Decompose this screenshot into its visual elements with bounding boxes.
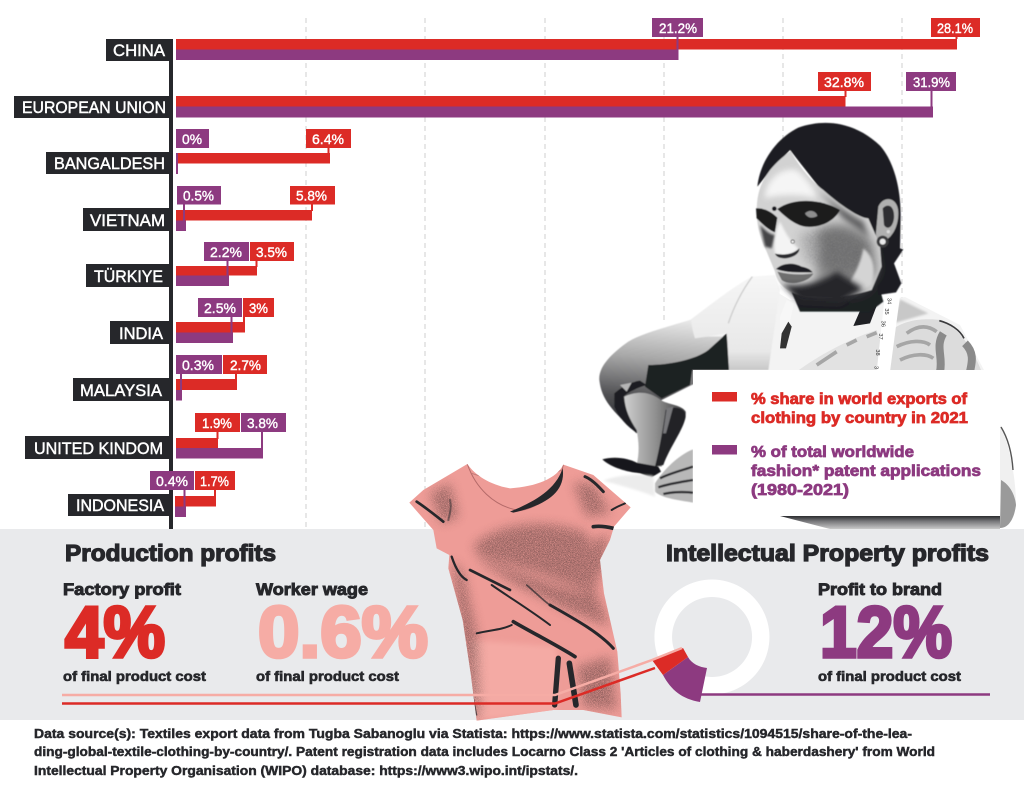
saree and tape: 37 (877, 333, 883, 340)
row: India: 3% (249, 300, 268, 316)
chin shadow (782, 272, 863, 303)
left cheek shadow (760, 225, 775, 248)
saree and tape: 36 (880, 321, 886, 327)
vertical axis (169, 39, 173, 529)
bindi (772, 206, 777, 211)
shirt body (409, 464, 631, 721)
row: China: CHINA (113, 42, 165, 60)
lower shirt highlight (470, 640, 557, 720)
row: United Kingdom: 3.8% (247, 415, 278, 431)
factory profit: 4% (65, 593, 165, 673)
scissors (602, 458, 661, 477)
panel: profits (0, 529, 1024, 720)
mottled shading (430, 483, 617, 720)
connector lines and donut (62, 580, 990, 704)
profit to brand: 12% (820, 593, 952, 673)
data source note (34, 727, 935, 778)
legend: patents: (1980-2021) (751, 482, 849, 499)
heading: Intellectual Property profits (666, 540, 989, 566)
row: Bangladesh (46, 129, 351, 174)
panel: intellectual property profits (666, 540, 989, 684)
factory profit: of final product cost (63, 668, 206, 684)
legend: patents: fashion* patent applications (751, 463, 981, 480)
worker wage: Worker wage (256, 581, 368, 599)
line: factory profit (62, 668, 655, 704)
row: China: 28.1% (937, 20, 973, 36)
chart gridlines (306, 18, 902, 528)
cloth (603, 475, 655, 497)
row: Bangladesh: BANGALDESH (54, 155, 165, 173)
cutting hand (624, 393, 686, 467)
data source note: ding-global-textile-clothing-by-country/. Patent registration data includes Locarno Class 2 'Articles of clothing & haberdashery' from World (34, 745, 935, 759)
row: European Union: 32.8% (824, 74, 864, 90)
saree and tape (780, 293, 982, 372)
row: United Kingdom (25, 413, 286, 459)
wrist band (614, 381, 647, 433)
worker wage: 0.6% (258, 593, 428, 673)
row: European Union (14, 72, 956, 118)
legend: patents (712, 444, 981, 499)
head (756, 123, 903, 312)
ear (875, 199, 898, 243)
worker wage: of final product cost (256, 668, 399, 684)
row: Indonesia (68, 471, 235, 517)
arm, hands and scissors (599, 275, 780, 503)
jaw (850, 248, 874, 290)
neck (790, 265, 883, 312)
factory profit: Factory profit (63, 581, 182, 599)
row: Malaysia (73, 355, 267, 401)
legend: exports (712, 391, 968, 427)
nose (774, 222, 798, 255)
row: Vietnam: VIETNAM (90, 212, 165, 230)
bar chart (14, 18, 980, 529)
legend: patents: % of total worldwide (751, 444, 914, 461)
collar (467, 464, 563, 511)
row: United Kingdom: UNITED KINDOM (34, 440, 163, 458)
data source note: Data source(s): Textiles export data from Tugba Sabanoglu via Statista: https://www.statista.com/statistics/1094515/share-of-the-lea- (34, 727, 912, 741)
row: Malaysia: 2.7% (230, 357, 261, 373)
earring (877, 236, 889, 248)
left eye socket (756, 208, 777, 232)
collar fold (510, 468, 563, 513)
row: Vietnam: 0.5% (183, 188, 214, 204)
row: Malaysia: 0.3% (182, 357, 214, 373)
profit to brand: Profit to brand (818, 581, 942, 599)
row: Indonesia: INDONESIA (76, 497, 164, 515)
photo: garment worker cutting cloth (599, 123, 1016, 529)
cheek shadow (813, 224, 877, 293)
right eye socket (777, 201, 840, 227)
row: Türkiye: 2.2% (210, 244, 242, 260)
legend: exports: % share in world exports of (751, 391, 968, 408)
row: Vietnam (83, 186, 335, 231)
row: India: 2.5% (204, 300, 236, 316)
purple wedge (663, 657, 707, 702)
t-shirt (409, 464, 631, 721)
factory profit (63, 581, 206, 684)
row: India: INDIA (119, 325, 163, 343)
line: worker wage (62, 648, 682, 695)
hair (757, 123, 903, 295)
row: China: 21.2% (659, 20, 697, 36)
forehead highlight (765, 170, 817, 198)
row: Türkiye: 3.5% (256, 244, 287, 260)
row: United Kingdom: 1.9% (202, 415, 232, 431)
row: Türkiye: TÜRKIYE (94, 268, 163, 286)
row: China (106, 18, 980, 61)
saree and tape: 35 (883, 308, 889, 315)
profit to brand: of final product cost (818, 668, 961, 684)
cloth shadow under legend (780, 516, 1000, 529)
red wedge (652, 648, 688, 675)
lower right arm (1000, 425, 1016, 528)
row: Indonesia: 1.7% (200, 473, 229, 489)
saree and tape: 38 (874, 349, 880, 356)
sleeve (691, 275, 780, 370)
row: Malaysia: MALAYSIA (80, 382, 162, 400)
legend: exports: clothing by country in 2021 (751, 410, 968, 427)
data source note: Intellectual Property Organisation (WIPO) database: https://www3.wipo.int/ipstats/. (34, 764, 578, 778)
row: Indonesia: 0.4% (156, 473, 188, 489)
row: Vietnam: 5.8% (296, 188, 327, 204)
mouth (776, 264, 813, 272)
underarm shadow (645, 333, 729, 398)
temple shadow (818, 190, 868, 238)
row: Bangladesh: 6.4% (312, 131, 344, 147)
line: brand profit (700, 693, 990, 696)
legend panel (693, 370, 1000, 516)
folds (417, 477, 625, 715)
other hand (655, 449, 693, 503)
upper arm (599, 319, 728, 433)
saree and tape: 34 (885, 298, 891, 304)
row: Bangladesh: 0% (182, 131, 202, 147)
panel: production profits (63, 540, 428, 684)
donut ring (654, 580, 769, 694)
row: Türkiye (86, 242, 294, 287)
row: European Union: 31.9% (913, 74, 950, 90)
saree and tape: 3 (873, 366, 879, 369)
face (757, 151, 882, 298)
heading: Production profits (65, 540, 276, 566)
row: European Union: EUROPEAN UNION (22, 99, 166, 117)
torso and blouse (691, 277, 985, 372)
row: India (110, 298, 274, 344)
